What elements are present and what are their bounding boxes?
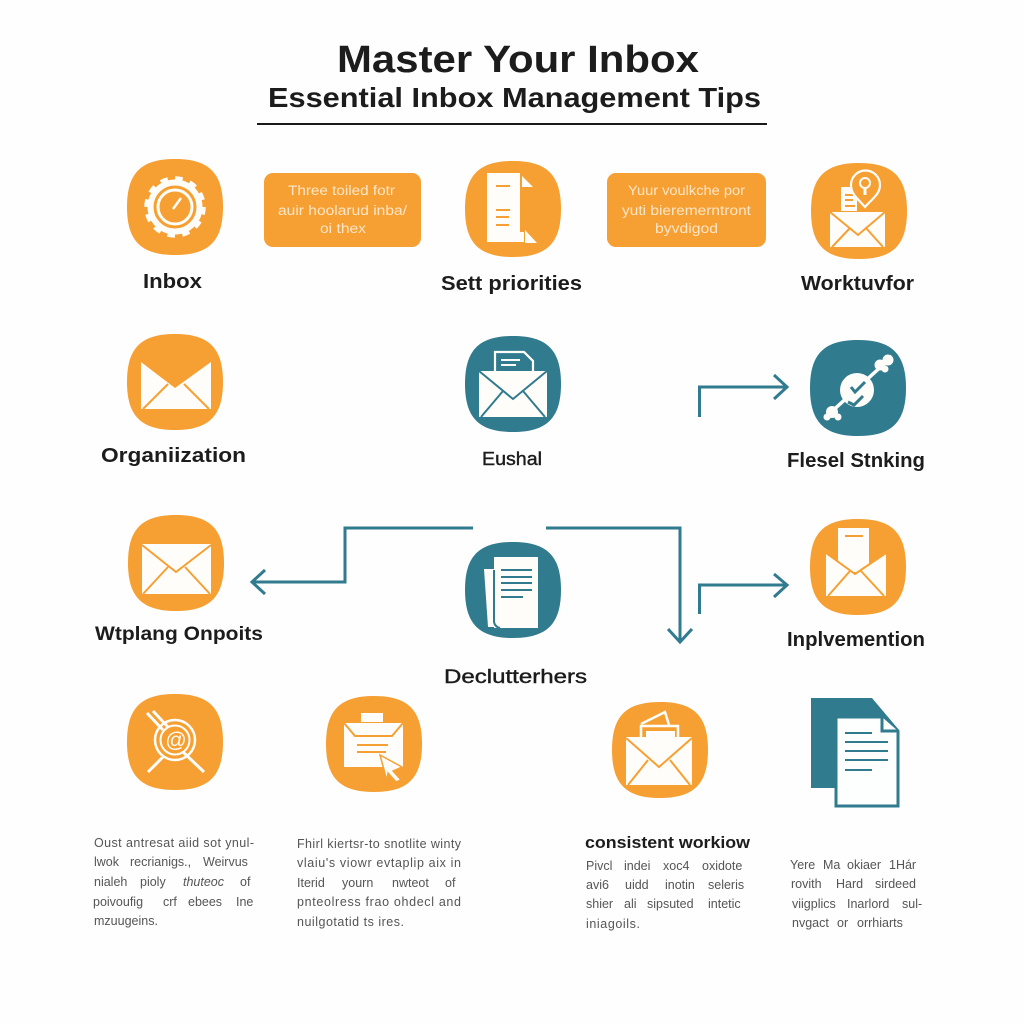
text block: column three: avi6 xyxy=(586,878,609,892)
text block: column one: poivoufig xyxy=(93,895,143,909)
icon: envelope orange row three xyxy=(128,515,224,611)
text block: column three: shier xyxy=(586,897,613,911)
text block: column four: sul- xyxy=(902,897,922,911)
text block: column one xyxy=(93,836,254,928)
text block: column one: Oust antresat aiid sot ynul- xyxy=(94,836,254,850)
text block: column four: orrhiarts xyxy=(857,916,903,930)
text block: column one: Weirvus xyxy=(203,855,248,869)
icon: at sign target xyxy=(127,694,223,790)
text block: column three: uidd xyxy=(625,878,649,892)
label: Sett priorities: Sett priorities xyxy=(441,273,582,295)
heading: consistent workflow: consistent workiow xyxy=(585,833,751,852)
label: Eushal: Eushal xyxy=(482,449,542,469)
label: Declutterhers: Declutterhers xyxy=(444,667,587,688)
text block: column four xyxy=(790,858,922,930)
label: Inbox: Inbox xyxy=(143,271,202,293)
text block: column one: Ine xyxy=(236,895,253,909)
arrow: down branch xyxy=(546,528,692,642)
text block: column four: rovith xyxy=(791,877,822,891)
text block: column one: nialeh xyxy=(94,875,127,889)
text block: column four: or xyxy=(837,916,848,930)
text block: column three: oxidote xyxy=(702,859,742,873)
icon: teal envelope xyxy=(465,336,561,432)
icon: open envelope with letter xyxy=(612,702,708,798)
text block: column three: indei xyxy=(624,859,650,873)
icon: envelope with card xyxy=(810,519,906,615)
label: Wtplang Onpoits: Wtplang Onpoits xyxy=(95,624,263,645)
arrow: to implementation xyxy=(700,574,787,614)
icon: teal key with checkmarks xyxy=(810,340,906,436)
icon: envelope with light bulb pin xyxy=(811,163,907,259)
text block: column two: nwteot xyxy=(392,876,429,890)
text block: column two: yourn xyxy=(342,876,373,890)
text block: column one: pioly xyxy=(140,875,166,889)
text block: column two: vlaiu's viowr evtaplip aix in xyxy=(297,856,461,870)
text block: column four: okiaer xyxy=(847,858,881,872)
callout: first orange note: Three toiled fotr xyxy=(288,183,396,198)
icon: teal document xyxy=(811,698,899,806)
text block: column one: mzuugeins. xyxy=(94,914,158,928)
text block: column one: of xyxy=(240,875,251,889)
text block: column two: pnteolress frao ohdecl and xyxy=(297,895,461,909)
text block: column one: recrianigs., xyxy=(130,855,191,869)
label: Flesel Stnking: Flesel Stnking xyxy=(787,450,925,472)
text block: column four: Ma xyxy=(823,858,840,872)
text block: column three: intetic xyxy=(708,897,741,911)
callout: second orange note xyxy=(607,173,766,247)
label: Implementation: Inplvemention xyxy=(787,629,925,651)
text block: column three: inotin xyxy=(665,878,695,892)
label: Workflow: Worktuvfor xyxy=(801,273,914,295)
label: Organization: Organiization xyxy=(101,445,246,467)
text block: column four: 1Hár xyxy=(889,858,916,872)
text block: column three: sipsuted xyxy=(647,897,694,911)
text block: column one: thuteoc xyxy=(183,875,225,889)
arrow: left branch xyxy=(252,528,473,594)
text block: column two: of xyxy=(445,876,456,890)
subtitle: Essential Inbox Management Tips xyxy=(268,82,761,113)
callout: second orange note: byvdigod xyxy=(655,221,718,236)
icon: document priorities xyxy=(465,161,561,257)
title: Master Your Inbox xyxy=(337,39,699,81)
icon: envelope organization xyxy=(127,334,223,430)
text block: column two: Iterid xyxy=(297,876,325,890)
text block: column four: nvgact xyxy=(792,916,829,930)
text block: column three xyxy=(586,859,744,931)
callout: second orange note: yuti bieremerntront xyxy=(622,203,751,218)
text block: column three: Pivcl xyxy=(586,859,612,873)
text block: column two: Fhirl kiertsr-to snotlite winty xyxy=(297,837,462,851)
text block: column three: iniagoils. xyxy=(586,917,640,931)
arrow: to fresh sorting xyxy=(700,375,787,417)
text block: column four: viigplics xyxy=(792,897,836,911)
text block: column two: nuilgotatid ts ires. xyxy=(297,915,404,929)
text block: column four: Hard xyxy=(836,877,863,891)
callout: first orange note xyxy=(264,173,421,247)
callout: first orange note: auir hoolarud inba/ xyxy=(278,203,407,218)
callout: first orange note: oi thex xyxy=(320,221,366,236)
icon: teal documents xyxy=(465,542,561,638)
text block: column four: Inarlord xyxy=(847,897,889,911)
icon: gear inbox xyxy=(127,159,223,255)
icon: at sign target: @ xyxy=(165,729,186,752)
text block: column three: ali xyxy=(624,897,637,911)
text block: column one: ebees xyxy=(188,895,222,909)
text block: column four: Yere xyxy=(790,858,815,872)
text block: column one: lwok xyxy=(94,855,120,869)
text block: column three: xoc4 xyxy=(663,859,689,873)
text block: column one: crf xyxy=(163,895,177,909)
text block: column four: sirdeed xyxy=(875,877,916,891)
text block: column two xyxy=(297,837,462,929)
text block: column three: seleris xyxy=(708,878,744,892)
icon: envelope with cursor xyxy=(326,696,422,792)
callout: second orange note: Yuur voulkche por xyxy=(628,183,746,198)
